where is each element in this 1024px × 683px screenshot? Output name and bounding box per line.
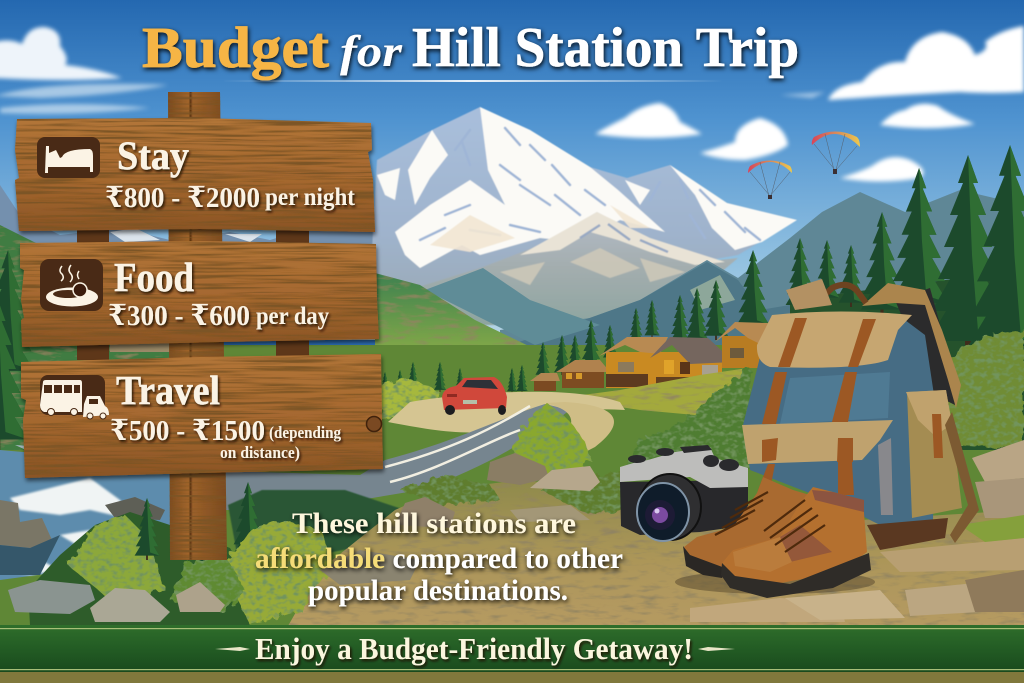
main post (168, 92, 227, 560)
foreground rocks right (690, 440, 1024, 622)
side pocket flap (906, 390, 952, 436)
side strap (945, 412, 979, 543)
cloud: top right (828, 26, 1024, 100)
side pocket (907, 390, 962, 518)
top handle (816, 285, 866, 303)
left flourish (215, 647, 250, 651)
left boot (684, 477, 810, 572)
icon: bus and van (40, 375, 109, 419)
right foothills (425, 190, 1024, 370)
cloud: top left (0, 27, 122, 80)
title: Hill Station Trip (412, 17, 799, 79)
conifer trees right (381, 145, 1024, 395)
wood knot (366, 416, 382, 432)
camera lens (637, 474, 701, 541)
right flourish (698, 647, 735, 651)
silver top plate (620, 447, 748, 488)
footer text: Enjoy a Budget-Friendly Getaway! (255, 631, 693, 666)
price: stay: ₹800 - ₹2000 (105, 182, 260, 214)
mountains: main snow massif (370, 107, 797, 325)
price: stay: per night (265, 184, 356, 211)
caption: These hill stations are (292, 507, 576, 540)
blue panel light (780, 372, 890, 424)
left side forest (0, 225, 170, 450)
plank: travel (21, 354, 383, 478)
title: Budget (142, 15, 330, 80)
grey road (190, 404, 570, 510)
blue-shaded hatching (420, 128, 760, 240)
caption: popular destinations. (308, 574, 568, 607)
laces (715, 492, 825, 552)
round bush in valley (512, 404, 592, 478)
signpost (15, 92, 383, 560)
lower pocket (742, 420, 893, 464)
dark bushes beside road (620, 368, 755, 480)
ridge snow streaks (520, 212, 725, 265)
mid rocks (320, 453, 600, 585)
paragliders (748, 132, 860, 199)
folded strap top (786, 279, 832, 310)
hiking boots (675, 477, 875, 598)
mountain base (370, 107, 797, 320)
cabin right (715, 322, 768, 368)
snow faces (377, 107, 797, 268)
icon: food plate (40, 259, 103, 311)
cabin left (599, 337, 668, 388)
caption: affordable compared to other (255, 542, 623, 575)
caption (255, 507, 623, 607)
centre foreground ground (280, 480, 1024, 640)
clouds (0, 26, 1024, 182)
footer banner (0, 625, 1024, 672)
price: food: ₹300 - ₹600 (108, 300, 250, 332)
leather straps (758, 318, 943, 495)
right boot collar (812, 490, 864, 512)
right boot panel (780, 525, 832, 562)
cream snow tint (430, 205, 650, 252)
left distant mountains (0, 185, 375, 320)
forest behind backpack (790, 270, 1024, 450)
midground meadow (0, 345, 1024, 625)
price: food (108, 300, 329, 332)
foreground rocks left (8, 580, 225, 622)
boot shadow (675, 570, 875, 594)
road lines (385, 406, 530, 482)
cloud: right small (880, 104, 975, 128)
title (142, 15, 799, 80)
shrub right of post (170, 555, 245, 612)
dark shrub base (28, 512, 255, 625)
rapids (0, 478, 135, 575)
camera body (620, 480, 748, 535)
yellow shrubs valley (380, 378, 440, 420)
road (190, 392, 625, 510)
price: travel: ₹500 - ₹1500 (110, 415, 265, 447)
tan shoulder strap (862, 283, 961, 408)
camera (620, 445, 748, 541)
sand road upper (388, 392, 625, 432)
icon: bed (37, 137, 100, 178)
label: travel: Travel (116, 367, 220, 413)
paraglider left (748, 160, 792, 199)
dials (628, 445, 739, 471)
wisps left (0, 84, 168, 114)
hill behind signs centre (110, 342, 170, 352)
red car (442, 377, 507, 415)
cloud: centre (595, 103, 702, 138)
plank: stay (15, 118, 375, 232)
forest edge right bushes (940, 330, 1024, 450)
price: travel: (depending (269, 423, 341, 442)
paraglider right (812, 132, 860, 174)
backpack (742, 279, 979, 550)
left river and rocks (0, 445, 195, 580)
left green hill (375, 273, 545, 405)
blue body (743, 320, 934, 525)
price: travel (110, 415, 341, 462)
cabins (530, 322, 768, 391)
distant slope (15, 445, 175, 470)
side support right (276, 225, 309, 360)
top flap (757, 312, 912, 368)
side support left (77, 225, 109, 360)
lit shrub (68, 515, 165, 600)
plank: food (20, 241, 379, 347)
cloud: right low (840, 157, 923, 182)
river rocks (0, 500, 52, 548)
price: food: per day (256, 303, 329, 330)
green slope near rocks (400, 470, 640, 515)
bottom-left bushes (28, 482, 335, 625)
label: food: Food (114, 254, 194, 300)
right boot (722, 487, 867, 585)
cabin far left (530, 373, 560, 391)
meadow near cabins (560, 368, 750, 420)
lower ridge (415, 212, 738, 325)
cabin small (556, 360, 610, 388)
conifer trees left (0, 250, 34, 450)
sand track right (525, 402, 614, 470)
lit shrub centre (222, 520, 335, 625)
right boot toe (733, 537, 792, 572)
cabin centre (650, 337, 734, 387)
title underline (220, 80, 725, 82)
right boot sole (721, 553, 871, 598)
price: stay (105, 182, 356, 214)
label: stay: Stay (117, 133, 189, 178)
cloud: centre right (700, 118, 788, 160)
grey side panel (878, 438, 893, 515)
title: for (340, 27, 403, 76)
back pad (895, 288, 958, 405)
river (0, 450, 195, 580)
bottom panel (867, 518, 948, 550)
price: travel: on distance) (220, 443, 300, 462)
bottom ground strip (0, 670, 1024, 683)
background: sky (0, 0, 1024, 340)
left boot sole (683, 546, 725, 578)
dark treeline left of caption (228, 490, 405, 570)
